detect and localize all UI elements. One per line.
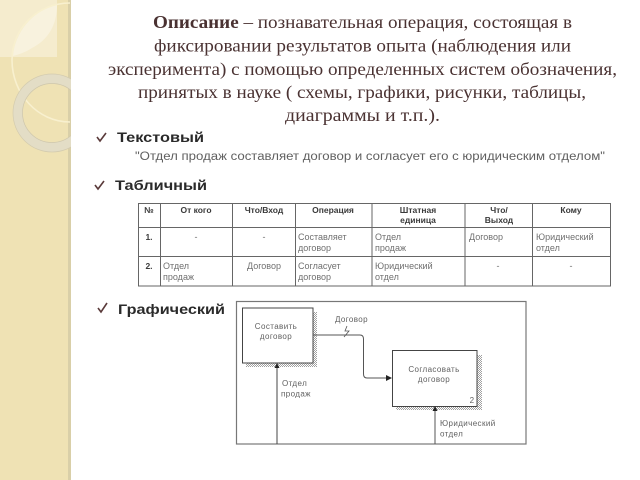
table: Юридический — [536, 232, 594, 242]
table: отдел — [536, 243, 560, 253]
label: Юридический отдел: отдел — [440, 430, 463, 438]
table — [138, 203, 610, 286]
table: - — [194, 232, 198, 242]
section: text form — [97, 129, 605, 163]
icon: check mark — [98, 303, 107, 312]
title: description paragraph: фиксировании результатов опыта (наблюдения или — [154, 36, 571, 56]
table: - — [262, 232, 266, 242]
arrow: output to second box — [313, 335, 392, 381]
title: description paragraph: Описание – познавательная операция, состоящая в — [153, 12, 572, 32]
table: Выход — [485, 215, 514, 225]
box: Согласовать договор: Согласовать — [408, 365, 460, 374]
table: Договор — [469, 232, 503, 242]
table: Отдел — [375, 232, 401, 242]
table: Что/ — [490, 205, 508, 215]
table: Договор — [247, 261, 281, 271]
table: От кого — [180, 205, 212, 215]
quote text: "Отдел продаж составляет договор и согласует его с юридическим отделом" — [135, 151, 605, 163]
table: Штатная — [400, 205, 436, 215]
box: Составить договор: договор — [260, 332, 292, 341]
table: Кому — [560, 205, 582, 215]
table: договор — [298, 272, 331, 282]
table: Согласует — [298, 261, 341, 271]
title: description paragraph — [108, 12, 617, 125]
label: Отдел продаж: Отдел — [282, 379, 307, 388]
arrow: input to first box — [274, 363, 280, 444]
table: Юридический — [375, 261, 433, 271]
box: Согласовать договор: 2 — [470, 396, 475, 405]
table: - — [570, 261, 572, 271]
box: Согласовать договор — [392, 350, 482, 410]
section: graphic form — [98, 301, 526, 444]
heading: Графический: Графический — [118, 301, 225, 317]
heading: Табличный: Табличный — [115, 177, 207, 193]
section: table form — [95, 177, 610, 286]
table: Операция — [312, 205, 354, 215]
icon: check mark — [97, 133, 106, 141]
title: description paragraph: принятых в науке ( схемы, графики, рисунки, таблицы, — [138, 82, 586, 102]
box: Согласовать договор: договор — [418, 375, 450, 384]
table: отдел — [375, 272, 399, 282]
title: description paragraph: диаграммы и т.п.). — [285, 105, 440, 125]
table: Отдел — [163, 261, 189, 271]
icon: check mark — [95, 181, 104, 189]
label: Отдел продаж: продаж — [281, 390, 311, 398]
box: Составить договор — [242, 308, 317, 367]
label: Договор: Договор — [335, 315, 368, 324]
table: 2. — [145, 261, 153, 271]
table: Что/Вход — [245, 205, 284, 215]
table: продаж — [375, 243, 406, 253]
arrow: input to second box — [432, 406, 438, 444]
panel: decorative sidebar — [0, 0, 71, 480]
table: продаж — [163, 272, 194, 282]
title: description paragraph: эксперимента) с помощью определенных систем обозначения, — [108, 59, 617, 79]
table: единица — [400, 215, 436, 225]
icon: squiggle — [344, 326, 349, 337]
box: Составить договор: Составить — [255, 322, 297, 331]
table: договор — [298, 243, 331, 253]
table: - — [496, 261, 500, 271]
heading: Текстовый: Текстовый — [117, 129, 204, 145]
table: Составляет — [298, 232, 347, 242]
label: Юридический отдел: Юридический — [440, 419, 496, 428]
table: № — [144, 205, 154, 215]
diagram — [236, 302, 526, 444]
table: 1. — [145, 232, 153, 242]
